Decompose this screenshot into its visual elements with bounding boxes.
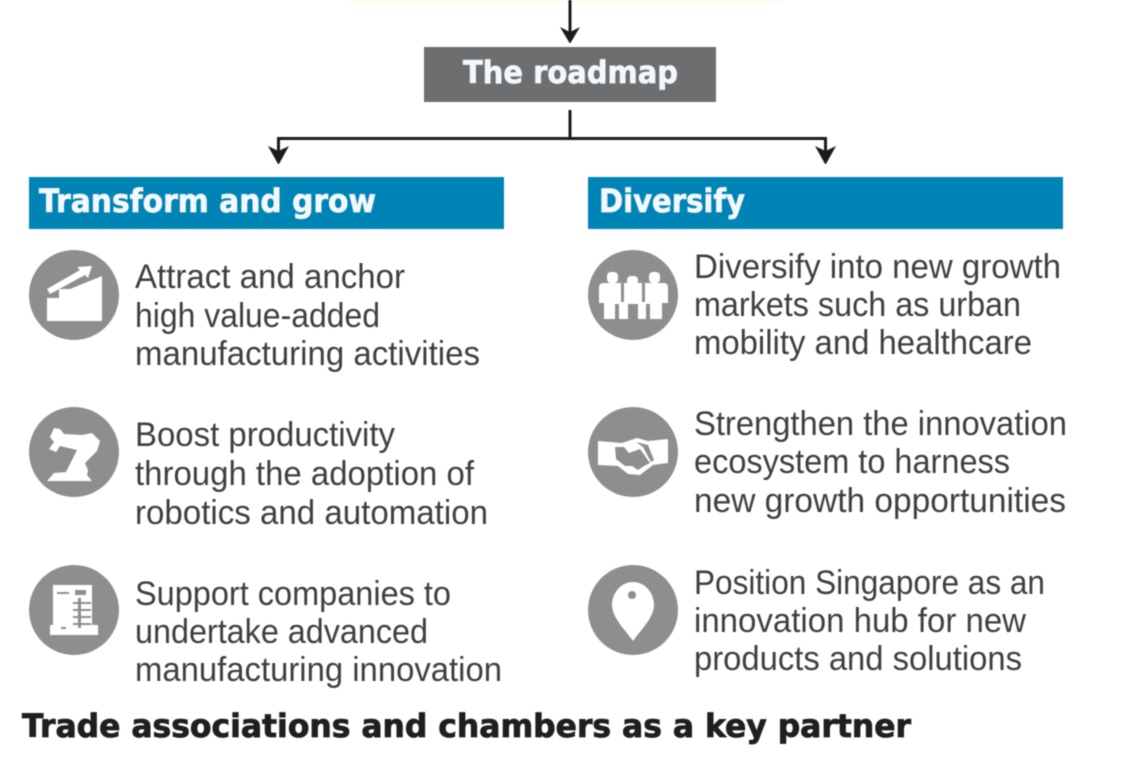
heading: transform and grow: [29, 177, 504, 229]
arrow: into roadmap: [560, 0, 580, 43]
text: boost: [135, 416, 488, 532]
text: position: innovation hub for new: [694, 602, 1026, 640]
text: diversify: Diversify into new growth: [694, 248, 1061, 286]
panel: diversify: [588, 177, 1067, 678]
text: support: undertake advanced: [135, 613, 428, 651]
panel: transform and grow: [29, 177, 504, 689]
text: boost: Boost productivity: [135, 416, 395, 454]
heading: diversify: [588, 177, 1063, 229]
text: boost: robotics and automation: [135, 494, 488, 532]
text: support: [135, 575, 502, 689]
roadmap box: [424, 47, 716, 102]
text: strengthen: [694, 405, 1067, 520]
arrow: branching to both columns: [268, 110, 836, 164]
roadmap box: The roadmap: [463, 55, 678, 91]
text: strengthen: new growth opportunities: [694, 482, 1066, 520]
text: support: Support companies to: [135, 575, 451, 613]
text: diversify: markets such as urban: [694, 286, 1021, 324]
text: boost: through the adoption of: [135, 455, 475, 493]
icon: location pin: [588, 565, 678, 655]
text: diversify: mobility and healthcare: [694, 324, 1032, 362]
text: diversify: [694, 248, 1061, 362]
icon: handshake: [588, 407, 678, 497]
icon: people: [588, 250, 678, 340]
text: position: Position Singapore as an: [694, 564, 1045, 602]
icon: rising factory: [29, 250, 119, 340]
icon: building: [29, 565, 119, 655]
text: attract: [135, 258, 480, 373]
text: attract: Attract and anchor: [135, 258, 405, 296]
text: position: [694, 564, 1045, 678]
heading: diversify: Diversify: [599, 182, 745, 220]
heading: transform and grow: Transform and grow: [39, 182, 376, 220]
icon: robot arm: [29, 407, 119, 497]
text: attract: manufacturing activities: [135, 335, 480, 373]
text: strengthen: ecosystem to harness: [694, 443, 1010, 481]
text: attract: high value-added: [135, 297, 380, 335]
text: position: products and solutions: [694, 640, 1022, 678]
heading: trade associations: Trade associations and chambers as a key partner: [22, 707, 911, 745]
text: support: manufacturing innovation: [135, 651, 502, 689]
text: strengthen: Strengthen the innovation: [694, 405, 1067, 443]
